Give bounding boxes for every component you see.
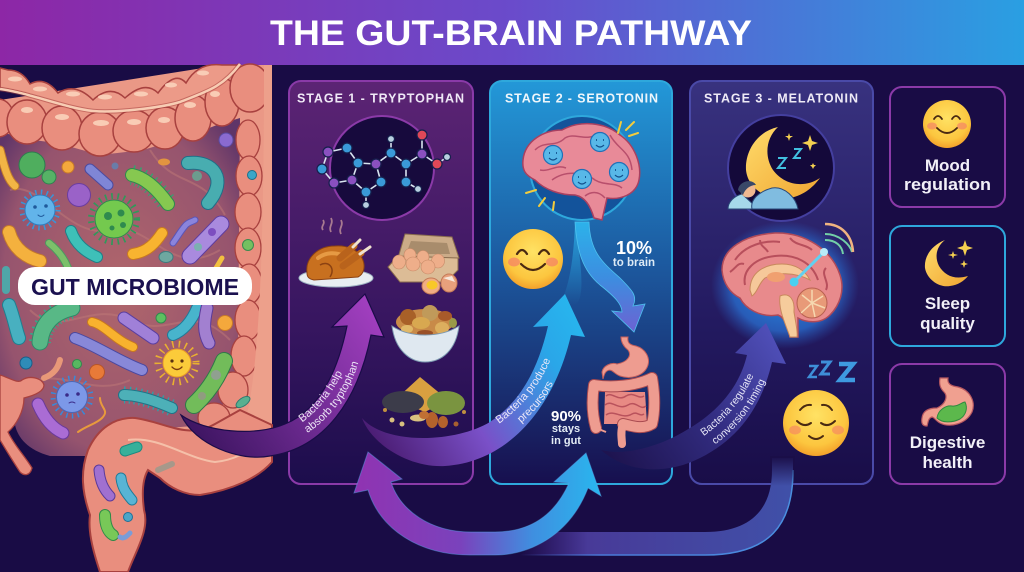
descending colon — [83, 410, 272, 572]
arrow: bacteria produce precursors — [362, 294, 585, 466]
header banner — [0, 0, 1024, 65]
icon: moon and stars — [925, 240, 973, 286]
90% stays in gut — [551, 408, 581, 447]
arrow: 10 percent to brain branch — [564, 222, 645, 332]
arrow: bacteria produce precursors: precursors — [518, 382, 552, 424]
icon: zzz — [809, 362, 855, 380]
icon: seeds and grains — [382, 377, 466, 428]
mood text: Mood — [925, 156, 970, 175]
10% to brain: to brain — [613, 257, 655, 269]
title: THE GUT-BRAIN PATHWAY — [270, 14, 752, 53]
icon: stomach and intestines — [593, 337, 654, 444]
stage 3 heading: STAGE 3 - MELATONIN — [704, 92, 858, 106]
stage 2 heading: STAGE 2 - SEROTONIN — [505, 92, 658, 106]
90% stays in gut: stays — [552, 423, 580, 435]
arrow: bacteria produce precursors: Bacteria produce — [495, 358, 550, 424]
gut microbiome label — [18, 267, 252, 305]
arrow: bacteria regulate conversion timing — [602, 323, 786, 470]
card: mood regulation — [890, 87, 1005, 207]
ileum — [0, 375, 44, 475]
quality text: quality — [920, 314, 975, 333]
colon wall — [0, 65, 272, 436]
stage 1 heading: STAGE 1 - TRYPTOPHAN — [297, 92, 464, 106]
microbes lower — [9, 305, 252, 538]
regulation text: regulation — [904, 175, 991, 194]
icon: happy face — [503, 229, 563, 289]
icon: egg carton — [388, 234, 459, 294]
90% stays in gut: in gut — [551, 435, 581, 447]
arrow: double headed return loop — [354, 452, 601, 555]
icon: smile — [923, 100, 971, 148]
digestive text: Digestive — [910, 433, 985, 452]
icon: bowl of nuts — [392, 305, 459, 362]
mucosa veins — [10, 150, 230, 390]
card: sleep quality — [890, 226, 1005, 346]
health text: health — [922, 453, 973, 472]
arrow: bacteria help absorb tryptophan: Bacteria help — [298, 371, 342, 422]
panel: stage 2 serotonin — [490, 81, 672, 484]
arrow: bacteria regulate conversion timing: conversion timing — [712, 379, 766, 444]
microbes upper — [0, 133, 256, 290]
colon highlights — [8, 70, 220, 126]
colon folds right — [198, 120, 262, 433]
arrow: feedback from stage 3 — [520, 456, 795, 555]
colon folds lower row — [0, 64, 270, 156]
colon highlight — [128, 438, 268, 462]
panel: gut microbiome illustration — [0, 64, 272, 572]
card: digestive health — [890, 364, 1005, 484]
icon: roast turkey — [299, 218, 373, 287]
arrow: bacteria help absorb tryptophan: absorb tryptophan — [305, 362, 358, 432]
10% to brain: 10% — [616, 238, 652, 258]
molecule circle — [317, 116, 450, 220]
90% stays in gut: 90% — [551, 408, 581, 425]
colon folds upper row — [0, 65, 240, 111]
arrow: bacteria regulate conversion timing: Bacteria regulate — [700, 374, 753, 436]
panel: stage 1 tryptophan — [289, 81, 473, 484]
sleep text: Sleep — [925, 294, 970, 313]
colon band — [0, 64, 240, 111]
brain circle — [523, 116, 640, 220]
gut interior — [0, 118, 240, 456]
10% to brain — [613, 238, 655, 269]
arrow: bacteria help absorb tryptophan — [180, 293, 385, 458]
icon: stomach — [922, 378, 973, 426]
gut microbiome label: GUT MICROBIOME — [31, 274, 239, 300]
panel: stage 3 melatonin — [690, 81, 873, 484]
icon: sleeping face — [783, 390, 849, 456]
colon outer strip — [240, 65, 272, 436]
brain with pineal signal — [711, 221, 859, 349]
moon circle — [728, 115, 834, 221]
